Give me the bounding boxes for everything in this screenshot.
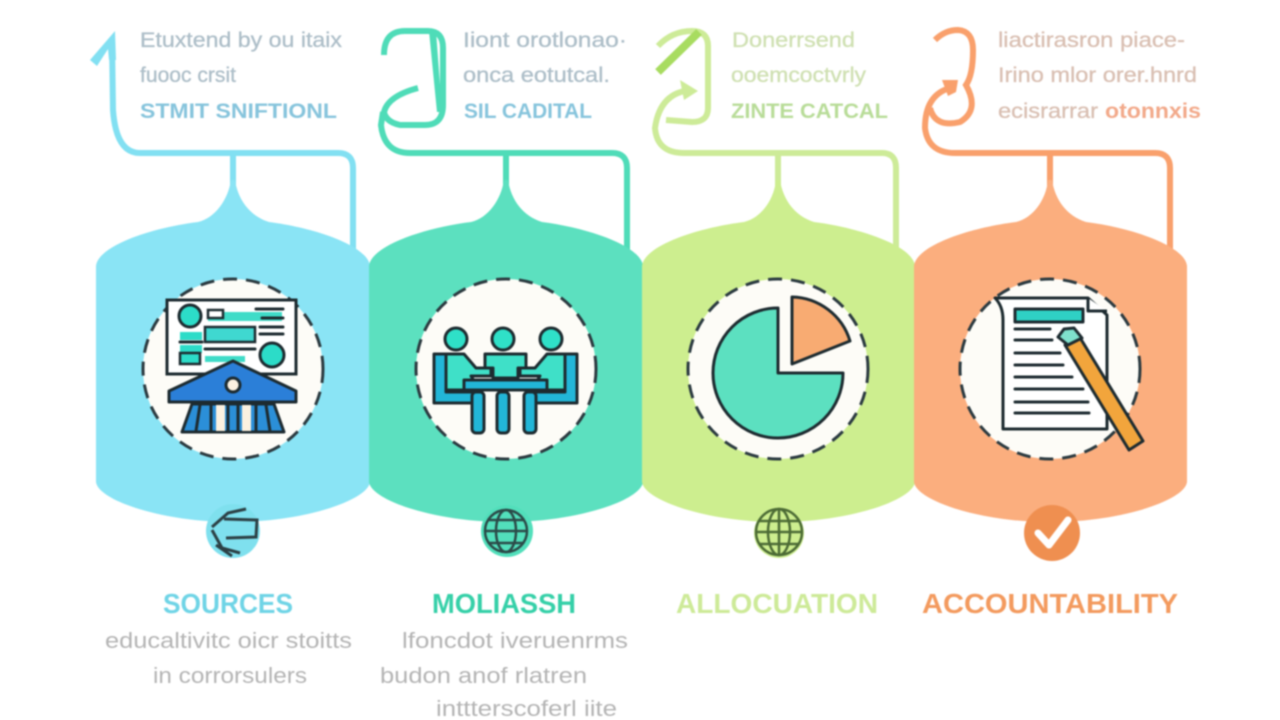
ring: green [688,279,868,459]
shape: teal blob [369,180,643,522]
panel: allocation [642,29,915,619]
ring: sources [143,279,323,459]
icon: orange arrowhead [942,80,958,96]
text block: teal top: Iiont orotlonao· [463,29,627,52]
text block: orange top: Irino mlor orer.hnrd [998,64,1197,87]
text block: sources top: Etuxtend by ou itaix [140,29,343,52]
small circle: sources [206,504,260,558]
text block: orange top: ecisrarrar [998,100,1098,123]
text block: teal description: lfoncdot iveruenrms [402,628,628,653]
ring: teal [416,279,596,459]
icon: institution with dashboard [167,300,296,432]
connector: sources arrow [112,40,353,252]
panel: accountability [914,29,1201,619]
icon: teal globe [485,510,527,552]
text block: green top [731,29,888,123]
shape: orange blob [914,180,1187,522]
shape: green blob [642,180,915,522]
icon: green globe [756,509,802,555]
small circle: teal [481,505,533,557]
icon: green diagonal stroke [658,32,699,72]
text block: orange top: liactirasron piace- [998,29,1185,52]
heading: orange: ACCOUNTABILITY [922,588,1178,619]
text block: sources description: in corrorsulers [153,663,307,688]
panel: sources [90,29,370,688]
panel: mobilisation [369,29,643,720]
heading: green: ALLOCUATION [676,588,878,619]
text block: sources description [105,628,352,688]
text block: teal top [463,29,627,123]
text block: green top: Donerrsend [732,29,855,52]
icon: people around a table [434,328,577,433]
connector: orange numeral arrow [925,30,1170,252]
text block: teal top: SIL CADITAL [464,100,592,123]
text block: orange top [998,29,1201,123]
text block: sources top: STMIT SNIFTIONL [140,100,337,123]
text block: teal description: budon anof rlatren [380,663,587,688]
connector: green numeral arrow [655,31,896,252]
icon: check badge [1024,505,1080,561]
text block: green top: ZINTE CATCAL [731,100,888,123]
connector: teal numeral arrow [381,31,627,252]
icon: green arrowhead [680,80,698,100]
icon: sources arrowhead [90,31,116,66]
text block: teal description [380,628,628,720]
icon: teal wedge [429,31,442,112]
shape: sources blob [96,180,370,522]
text block: sources top [140,29,343,123]
small circle: green [754,508,804,558]
ring: orange [960,279,1140,459]
icon: pie chart [713,297,850,438]
heading: sources: SOURCES [163,588,293,619]
text block: orange top: otonnxis [1105,100,1201,123]
heading: teal: MOLIASSH [432,588,576,619]
text block: sources top: fuooc crsit [140,64,236,87]
icon: document and pencil [995,298,1143,450]
text block: green top: ooemcoctvrly [731,64,867,87]
text block: sources description: educaltivitc oicr stoitts [105,628,352,653]
icon: sources small arrows [212,509,257,556]
text block: teal top: onca eotutcal. [463,64,610,87]
